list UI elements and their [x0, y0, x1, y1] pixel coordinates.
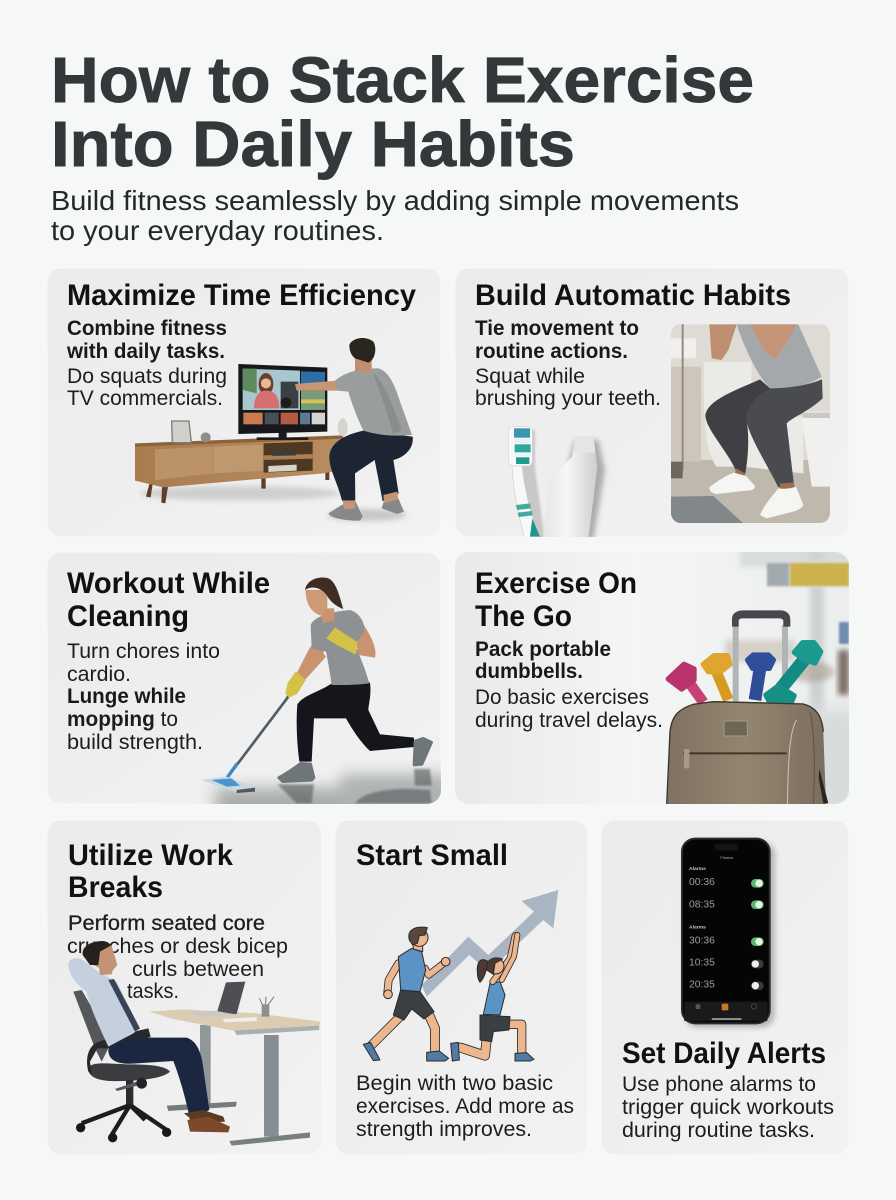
icon: phone with alarms: 30:36 — [689, 935, 715, 946]
man — [68, 941, 230, 1132]
text: set daily alerts body — [622, 1072, 834, 1142]
title — [51, 44, 754, 180]
text: exercise on the go body: Do basic exercises — [475, 685, 649, 709]
text: utilize work breaks body: curls between — [132, 957, 264, 981]
tv — [238, 364, 327, 440]
text: workout while cleaning body — [67, 639, 220, 754]
text: utilize work breaks body — [67, 911, 288, 1003]
arrow: rising progress — [422, 890, 558, 997]
text: start small body: exercises. Add more as — [356, 1094, 574, 1118]
photo: squat in bathroom — [671, 324, 832, 525]
figure: man walking — [363, 927, 450, 1061]
text: maximize time efficiency body: TV commercials. — [67, 386, 223, 410]
text: build automatic habits body: brushing your teeth. — [475, 386, 661, 410]
text: exercise on the go body: dumbbells. — [475, 660, 583, 683]
text: exercise on the go body — [475, 638, 663, 732]
text: start small body — [356, 1071, 574, 1141]
text: maximize time efficiency body: Combine fitness — [67, 317, 227, 340]
text: set daily alerts body: Use phone alarms to — [622, 1072, 816, 1096]
icon: phone with alarms: Alarms — [689, 866, 706, 872]
text: start small body: strength improves. — [356, 1117, 532, 1141]
desk — [149, 982, 321, 1146]
heading: start small: Start Small — [356, 839, 508, 872]
text: utilize work breaks body: crunches or desk bicep — [67, 934, 288, 958]
panel: maximize time efficiency — [47, 268, 441, 537]
text: maximize time efficiency body: Do squats during — [67, 364, 227, 388]
text: set daily alerts body: trigger quick workouts — [622, 1095, 834, 1119]
heading: utilize work breaks — [68, 839, 234, 904]
heading: build automatic habits: Build Automatic Habits — [475, 279, 791, 312]
icon: phone with alarms: 10:35 — [689, 958, 715, 969]
subtitle: to your everyday routines. — [51, 215, 384, 246]
panel: utilize work breaks — [47, 820, 322, 1155]
icon: phone with alarms: Fitness — [720, 855, 733, 860]
icon: phone with alarms: 08:35 — [689, 899, 715, 910]
text: exercise on the go body: Pack portable — [475, 638, 611, 661]
illustration: man squatting by tv stand — [135, 338, 413, 521]
icon: phone with alarms — [681, 838, 775, 1028]
heading: workout while cleaning: Cleaning — [67, 600, 189, 633]
heading: workout while cleaning — [67, 567, 270, 633]
text: workout while cleaning body: Turn chores into — [67, 639, 220, 663]
heading: exercise on the go: Exercise On — [475, 567, 637, 600]
text: maximize time efficiency body: with daily tasks. — [66, 340, 225, 363]
panel: start small — [335, 820, 588, 1155]
illustration: woman lunging while mopping — [201, 578, 432, 803]
panel: build automatic habits — [455, 268, 849, 540]
panel: set daily alerts — [601, 820, 849, 1155]
text: workout while cleaning body: build strength. — [67, 730, 203, 754]
subtitle: Build fitness seamlessly by adding simple movements — [51, 185, 739, 216]
figure: woman lunging — [451, 935, 534, 1061]
heading: workout while cleaning: Workout While — [67, 567, 270, 600]
subtitle — [51, 185, 739, 246]
text: build automatic habits body: routine actions. — [475, 340, 628, 363]
icon: phone with alarms: 20:35 — [689, 979, 715, 990]
man — [295, 338, 413, 521]
text: start small body: Begin with two basic — [356, 1071, 553, 1095]
illustration: two figures and rising arrow — [363, 890, 558, 1061]
illustration: suitcase with dumbbells — [667, 610, 828, 805]
text: workout while cleaning body: Lunge while — [67, 685, 186, 708]
chair — [73, 990, 171, 1142]
text: build automatic habits body: Tie movement to — [475, 317, 639, 340]
panel: exercise on the go — [455, 545, 860, 810]
illustration: toothbrush and toothpaste — [508, 427, 605, 540]
text: build automatic habits body: Squat while — [475, 364, 585, 388]
panel: workout while cleaning — [48, 552, 441, 804]
heading: set daily alerts: Set Daily Alerts — [622, 1037, 826, 1070]
text: utilize work breaks body: tasks. — [127, 979, 179, 1003]
illustration: man reclining at standing desk — [68, 941, 321, 1146]
heading: exercise on the go — [475, 567, 637, 633]
heading: exercise on the go: The Go — [475, 600, 572, 633]
title: How to Stack Exercise — [51, 44, 754, 116]
text: exercise on the go body: during travel delays. — [475, 708, 663, 732]
heading: maximize time efficiency: Maximize Time Efficiency — [67, 279, 417, 312]
background: blurred airport — [722, 552, 849, 804]
icon: phone with alarms: Alarms — [689, 924, 706, 930]
text: build automatic habits body — [475, 317, 661, 410]
text: maximize time efficiency body — [66, 317, 227, 410]
heading: utilize work breaks: Utilize Work — [68, 839, 234, 872]
heading: utilize work breaks: Breaks — [68, 871, 163, 904]
text: set daily alerts body: during routine tasks. — [622, 1118, 815, 1142]
title: Into Daily Habits — [51, 108, 575, 180]
text: workout while cleaning body: cardio. — [67, 662, 131, 686]
floor reflection — [206, 765, 441, 804]
text: utilize work breaks body: Perform seated core — [68, 911, 265, 935]
icon: phone with alarms: 00:36 — [689, 877, 715, 888]
text: workout while cleaning body: mopping to — [67, 707, 178, 731]
